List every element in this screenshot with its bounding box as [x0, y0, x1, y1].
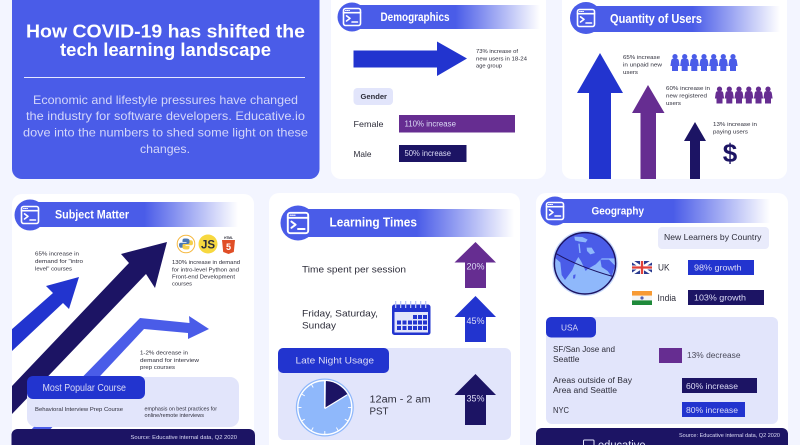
text: 130% increase: Front-end Development [172, 274, 235, 280]
heading: main title [26, 20, 305, 60]
panel: demographics [331, 0, 546, 179]
arrow: 35% [454, 374, 496, 425]
text: 60% increase registered: users [666, 101, 681, 107]
icons: blue people [670, 54, 738, 71]
row: uk: UK [658, 262, 670, 272]
header: learning times [280, 206, 514, 240]
panel: most popular course: Most Popular Course [42, 383, 126, 394]
heading: main title: How COVID-19 has shifted the [26, 20, 305, 42]
icon: javascript [198, 234, 218, 254]
text: 73% increase: 73% increase of [476, 49, 519, 55]
row: uk [632, 260, 754, 275]
header: geography [540, 196, 770, 226]
text: 13% increase paying [713, 122, 757, 136]
arrow: paying users [684, 122, 706, 179]
text: 65% increase unpaid: users [623, 70, 638, 76]
text: late night hours [370, 394, 430, 418]
panel: most popular course: online/remote interviews [144, 413, 204, 419]
row: sf: Seattle [553, 355, 580, 364]
row: sf: SF/San Jose and [553, 345, 615, 354]
arrow: 20%: 20% [466, 261, 485, 271]
text block: introduction: changes. [140, 142, 190, 156]
text: 60% increase registered: new registered [666, 94, 707, 100]
panel: usa [546, 317, 778, 424]
text: 130% increase: courses [172, 282, 192, 288]
row: nyc: NYC [553, 406, 569, 415]
row: india: India [658, 293, 676, 303]
text: 73% increase: age group [476, 64, 502, 70]
text: late night hours: 12am - 2 am [370, 394, 430, 406]
header: learning times: Learning Times [330, 214, 417, 230]
arrow: unpaid users [577, 53, 623, 179]
panel: late night usage [278, 348, 511, 440]
row: sf [553, 345, 741, 364]
arrow: 20% [454, 242, 496, 288]
text: 1-2% decrease [140, 350, 200, 371]
icon: globe [552, 231, 618, 295]
arrow: registered users [632, 85, 664, 179]
text: weekend days: Sunday [302, 320, 336, 332]
header: subject matter: Subject Matter [55, 208, 129, 222]
text: 65% increase unpaid: in unpaid new [623, 62, 662, 68]
text: 65% increase unpaid: 65% increase [623, 55, 660, 61]
header: demographics: Demographics [380, 12, 450, 24]
header: subject matter [14, 200, 238, 230]
arrow: interview prep demand [26, 316, 209, 435]
icon: dollar sign: $ [723, 138, 738, 168]
text block: introduction [23, 93, 308, 156]
panel: geography [536, 193, 788, 445]
text: 73% increase [476, 49, 527, 70]
panel: title [12, 0, 320, 179]
panel: quantity of users [562, 0, 787, 179]
panel: most popular course [27, 376, 239, 427]
row: male: Male [354, 149, 372, 159]
icon: calendar [392, 301, 430, 335]
text: late night hours: PST [370, 406, 388, 418]
text: 130% increase: 130% increase in demand [172, 260, 240, 266]
footer: right source and logo: Source: Educative internal data, Q2 2020 [679, 433, 780, 439]
row: india [632, 290, 764, 305]
text: 1-2% decrease: 1-2% decrease in [140, 350, 188, 356]
footer: left source [12, 429, 255, 445]
row: outside bay area [553, 376, 757, 395]
arrow: 45%: 45% [466, 316, 485, 326]
panel: learning times [269, 193, 520, 445]
row: female: 110% increase [404, 120, 457, 128]
row: uk: 98% growth [694, 264, 742, 272]
text block: introduction: the industry for software developers. Educative.io [26, 109, 305, 123]
text: 60% increase registered [666, 86, 710, 107]
header: geography: Geography [592, 206, 645, 218]
row: sf: 13% decrease [687, 351, 741, 360]
text: time spent: Time spent per session [302, 264, 406, 276]
icon: html5 [222, 236, 235, 254]
text: 130% increase: for intro-level Python and [172, 268, 239, 274]
icon: html5: 5 [226, 242, 231, 252]
text: 65% increase unpaid [623, 55, 662, 76]
header: quantity of users [570, 2, 780, 34]
pill: gender [354, 88, 393, 105]
text: 130% increase [172, 260, 240, 288]
text: 1-2% decrease: prep courses [140, 365, 175, 371]
icon: html5: HTML [224, 236, 233, 240]
row: female: Female [354, 119, 384, 129]
arrow: intro level demand [11, 277, 79, 352]
panel: subject matter [11, 194, 254, 445]
text: 60% increase registered: 60% increase in [666, 86, 710, 92]
header: demographics [338, 2, 540, 32]
icons: purple people [715, 86, 773, 104]
footer: right source and logo [536, 428, 788, 445]
text block: introduction: Economic and lifestyle pressures have changed [33, 93, 298, 107]
text: 65% increase intro level [35, 252, 83, 272]
panel: most popular course: emphasis on best practices for [144, 406, 217, 412]
text: 65% increase intro level: level" courses [35, 266, 72, 272]
panel: usa: USA [561, 322, 578, 332]
label: new learners by country: New Learners by Country [664, 232, 762, 242]
icon: clock [296, 378, 354, 436]
label: new learners by country [658, 227, 769, 249]
row: outside bay area: 60% increase [686, 382, 739, 391]
icon: india flag [632, 291, 652, 305]
row: outside bay area: Areas outside of Bay [553, 376, 632, 385]
row: male: 50% increase [404, 149, 452, 158]
text: 13% increase paying: 13% increase in [713, 122, 757, 128]
text: weekend days: Friday, Saturday, [302, 308, 378, 320]
text: 73% increase: new users in 18-24 [476, 56, 527, 62]
arrow: 35%: 35% [466, 393, 485, 403]
row: nyc [553, 402, 745, 417]
arrow: python and front-end demand [11, 242, 167, 415]
icon: javascript: JS [201, 240, 215, 252]
arrow: 45% [454, 296, 496, 342]
text: 1-2% decrease: demand for interview [140, 358, 200, 364]
text block: introduction: dove into the numbers to shed some light on these [23, 126, 308, 140]
row: nyc: 80% increase [686, 406, 739, 415]
footer: left source: Source: Educative internal data, Q2 2020 [130, 435, 237, 441]
row: male [354, 145, 466, 162]
text: 13% increase paying: paying users [713, 130, 748, 136]
pill: gender: Gender [360, 92, 387, 101]
panel: late night usage: Late Night Usage [296, 355, 374, 365]
panel: most popular course: Behavioral Interview Prep Course [35, 407, 123, 413]
heading: main title: tech learning landscape [60, 39, 271, 60]
text: 65% increase intro level: 65% increase in [35, 252, 79, 258]
row: india: 103% growth [694, 294, 746, 302]
text: 65% increase intro level: demand for "intro [35, 259, 83, 265]
icon: python [177, 235, 195, 253]
text: weekend days [302, 308, 378, 332]
header: quantity of users: Quantity of Users [610, 11, 702, 26]
row: female [354, 115, 515, 132]
row: outside bay area: Area and Seattle [553, 386, 618, 395]
arrow: new users [354, 42, 467, 76]
icon: uk flag [632, 261, 652, 274]
